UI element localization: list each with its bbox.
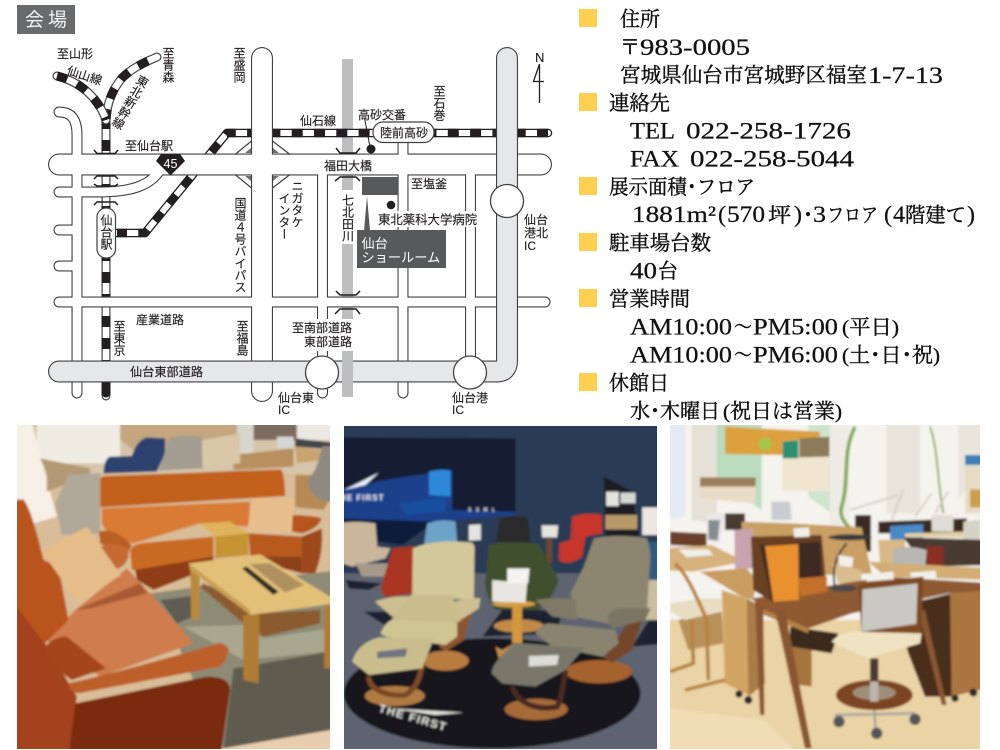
map labels: directions and lines: 至南部道路	[292, 320, 352, 335]
closed days block: (祝日は営業)	[723, 400, 842, 423]
station: Sendai: 仙台駅	[99, 214, 113, 251]
venue tag: 会場	[25, 9, 71, 31]
floor area block: (	[884, 202, 892, 228]
route 45 badge	[156, 154, 185, 175]
landmark markers	[364, 118, 395, 209]
opening hours block: AM10:00	[630, 342, 732, 368]
contact block: 022-258-5044	[690, 146, 854, 172]
info panel: venue details	[579, 8, 975, 423]
floor area block: 展示面積･フロア	[609, 176, 755, 199]
map labels: directions and lines: 仙石線	[300, 113, 336, 128]
venue tag	[17, 5, 75, 34]
map labels: directions and lines: IC	[452, 403, 464, 417]
floor area block: )	[794, 202, 802, 228]
floor area block: 570	[727, 202, 765, 228]
map labels: directions and lines: 仙台東部道路	[130, 364, 203, 379]
route 45 badge: 45	[164, 157, 177, 171]
map labels: directions and lines: 国道４号バイパス	[233, 197, 247, 293]
map labels: directions and lines: 至東京	[112, 320, 126, 356]
contact block: TEL	[630, 118, 675, 144]
map labels: directions and lines: 至盛岡	[232, 47, 246, 84]
contact block: 連絡先	[609, 92, 670, 115]
river: Nanakita	[342, 59, 353, 397]
map labels: directions and lines: IC	[278, 403, 290, 417]
label backgrounds	[290, 190, 480, 351]
parking block: 台	[658, 260, 678, 283]
map labels: directions and lines: 至福島	[235, 320, 249, 357]
railway and river bridge marks	[94, 148, 360, 314]
yellow bullets	[579, 9, 597, 391]
north arrow	[534, 50, 544, 103]
opening hours block: AM10:00	[630, 314, 732, 340]
opening hours block: (平日)	[842, 316, 899, 339]
map labels: directions and lines: 仙台東	[278, 390, 314, 405]
map labels: directions and lines: 仙台	[524, 212, 548, 227]
desk scene	[662, 417, 992, 750]
opening hours block: PM6:00	[753, 342, 838, 368]
closed days block: 水･木曜日	[630, 400, 720, 423]
station: Rikuzen-Takasago: 陸前高砂	[380, 125, 428, 140]
opening hours block: ～	[734, 345, 752, 367]
map labels: directions and lines: 港北	[524, 226, 548, 240]
recliner scene: THE FIRST	[377, 703, 448, 734]
address block: 住所	[620, 8, 660, 31]
photo: leather sofa showroom	[17, 425, 330, 749]
floor area block: 4	[893, 202, 905, 228]
map labels: directions and lines: 至仙台駅	[125, 138, 173, 153]
showroom label	[357, 230, 446, 268]
bypass: Sendai Tobu road and East road	[59, 58, 507, 372]
map labels: directions and lines: 東部道路	[304, 334, 352, 349]
map labels: directions and lines: 産業道路	[136, 312, 184, 327]
parking block: 駐車場台数	[608, 232, 711, 255]
floor area block: フロア	[827, 205, 878, 227]
railway lines	[57, 57, 548, 396]
closed days block	[609, 372, 842, 423]
floor area block: ･	[803, 205, 813, 227]
address block: 宮城県仙台市宮城野区福室	[620, 64, 867, 87]
road network	[59, 58, 545, 393]
map labels: directions and lines: 仙台港	[452, 390, 488, 405]
floor area block: 坪	[768, 204, 791, 227]
address block	[620, 8, 943, 89]
map labels: directions and lines: IC	[524, 239, 536, 253]
map labels: directions and lines: ニガタケ	[290, 180, 304, 228]
station: Sendai	[97, 208, 116, 258]
map labels: directions and lines	[57, 47, 548, 417]
map labels: directions and lines: 高砂交番	[358, 108, 406, 122]
address block: 983-0005	[640, 35, 750, 61]
map labels: directions and lines: 至塩釜	[411, 176, 447, 191]
recliner scene	[332, 417, 669, 750]
showroom building and pointer	[362, 177, 398, 231]
map labels: directions and lines: 至石巻	[432, 85, 446, 121]
recliner scene: SSML	[468, 508, 499, 514]
address block: 〒	[620, 37, 640, 59]
contact block: FAX	[630, 146, 679, 172]
opening hours block: ～	[734, 317, 752, 339]
parking block	[608, 232, 711, 284]
opening hours block: PM5:00	[753, 314, 838, 340]
river crossing over bypass	[342, 345, 353, 397]
floor area block: 1881m²	[632, 202, 716, 228]
floor area block: 3	[813, 202, 826, 228]
opening hours block: (土･日･祝)	[842, 344, 940, 367]
map labels: directions and lines: 至青森	[161, 47, 175, 83]
parking block: 40	[630, 258, 657, 284]
map labels: directions and lines: 東北新幹線	[109, 72, 151, 131]
map labels: directions and lines: 七北田川	[340, 194, 354, 242]
map labels: directions and lines: 福田大橋	[324, 158, 372, 173]
map panel: access map with venue tag	[17, 5, 552, 417]
station: Rikuzen-Takasago	[373, 122, 434, 142]
contact block: 022-258-1726	[686, 118, 851, 144]
map labels: directions and lines: インター	[277, 192, 291, 240]
closed days block: 休館日	[609, 372, 669, 395]
sofa scene	[7, 417, 340, 750]
floor area block	[609, 176, 975, 228]
interchanges	[306, 184, 524, 389]
showroom label: ショールーム	[362, 250, 440, 265]
floor area block: )	[967, 202, 975, 228]
photo: THE FIRST recliner display	[344, 426, 657, 749]
map labels: directions and lines: 至山形	[57, 47, 93, 61]
contact block	[609, 92, 854, 172]
map labels: directions and lines: 東北薬科大学病院	[378, 212, 477, 227]
north arrow: N	[535, 50, 544, 65]
showroom label: 仙台	[362, 236, 388, 251]
floor area block: 階建て	[905, 204, 966, 227]
map labels: directions and lines: 仙山線	[65, 63, 104, 88]
opening hours block	[609, 288, 940, 368]
opening hours block: 営業時間	[609, 288, 690, 311]
floor area block: (	[718, 202, 726, 228]
address block: 1-7-13	[868, 63, 943, 89]
photo: study desks and chairs	[670, 425, 980, 749]
